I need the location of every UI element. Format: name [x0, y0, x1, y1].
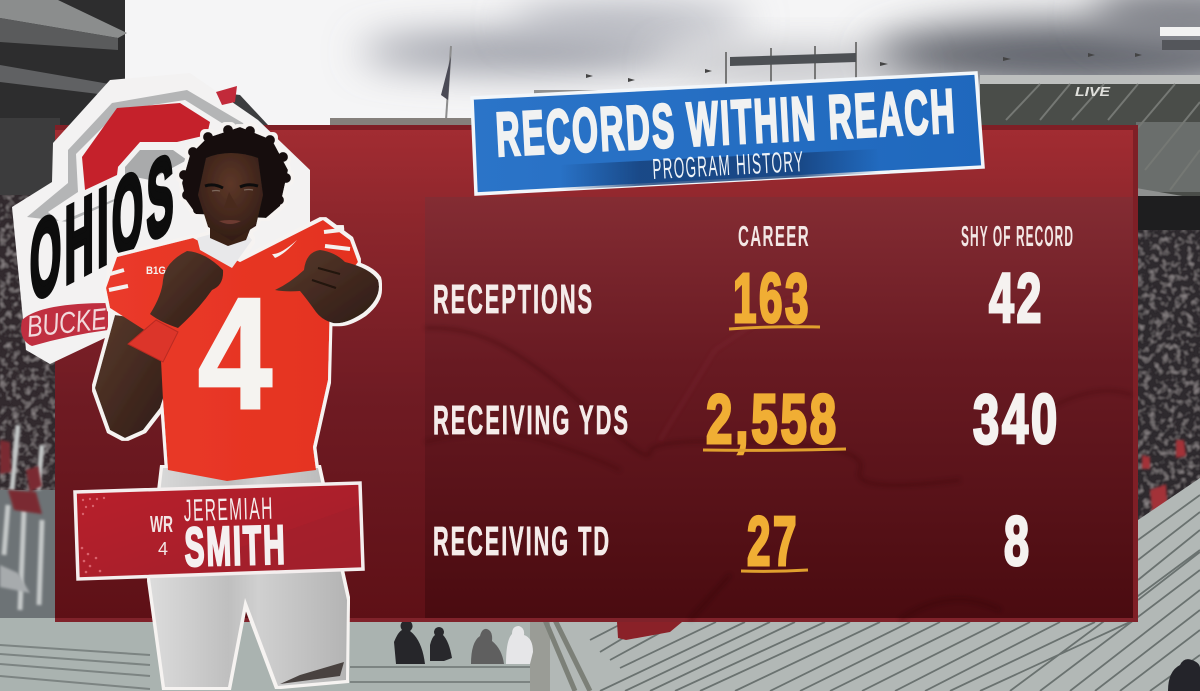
logo red O	[82, 103, 210, 190]
row value: yards shy of record: 340	[973, 380, 1060, 458]
logo white center	[118, 142, 200, 230]
left fist	[150, 251, 223, 328]
pants	[150, 468, 347, 687]
column heading: career: CAREER	[738, 221, 810, 253]
crowd, left	[0, 195, 56, 515]
upper deck seats, right	[980, 75, 1200, 206]
player first name: JEREMIAH	[183, 491, 274, 528]
logo: Ohio State block O	[12, 73, 310, 364]
fan, bottom right	[1168, 659, 1200, 691]
swoosh	[272, 240, 297, 258]
logo: Ohio State block O: OHIOS	[30, 129, 177, 325]
title banner	[472, 73, 983, 194]
player: Jeremiah Smith	[95, 125, 379, 687]
bleacher aisle with fans, left	[0, 425, 56, 622]
head: hair	[179, 125, 291, 218]
position and number: 4	[158, 539, 168, 559]
row value: touchdowns shy of record: 8	[1004, 502, 1029, 580]
lower bleachers	[0, 478, 1200, 691]
position and number	[150, 511, 173, 559]
row value: career receiving touchdowns: 27	[747, 502, 799, 580]
nameplate	[75, 483, 363, 579]
panel: red backdrop	[55, 125, 1138, 622]
pointing arm	[275, 250, 379, 323]
halftone dots	[81, 497, 105, 573]
logo red script badge	[21, 303, 109, 346]
row label: receptions: RECEPTIONS	[433, 276, 594, 322]
row label: receiving touchdowns: RECEIVING TD	[433, 518, 611, 564]
player surname: SMITH	[184, 513, 287, 578]
scoreboard sign and flags	[330, 27, 1200, 125]
sleeve stripes	[109, 230, 350, 290]
LIVE label: LIVE	[1075, 84, 1110, 99]
Big Ten mark: B1G	[146, 265, 166, 277]
logo gray ring	[27, 90, 250, 222]
jersey	[106, 220, 358, 481]
row value: receptions shy of record: 42	[989, 259, 1044, 337]
upper deck, left	[0, 0, 268, 198]
row value: career receiving yards: 2,558	[706, 380, 839, 458]
logo red script badge: BUCKE	[25, 303, 109, 344]
logo outer white shape	[12, 73, 310, 364]
collar	[197, 226, 252, 268]
position and number: WR	[150, 511, 173, 537]
crumple texture	[425, 300, 1132, 620]
panel: darker stats area	[425, 197, 1133, 618]
row label: receiving yards: RECEIVING YDS	[433, 397, 630, 443]
sky with clouds	[0, 0, 1200, 130]
wristband	[128, 320, 178, 362]
neck	[210, 225, 252, 246]
underline: receiving touchdowns	[741, 570, 808, 571]
title banner: PROGRAM HISTORY	[652, 146, 805, 186]
jersey number: 4	[198, 266, 272, 442]
head: face	[198, 153, 263, 241]
underline: receiving yards	[703, 449, 846, 450]
seated fans	[394, 620, 533, 664]
underline: receptions	[729, 327, 820, 329]
row value: career receptions: 163	[733, 259, 811, 337]
lower arm	[95, 315, 172, 438]
crowd, right	[1136, 196, 1200, 528]
stats table	[433, 221, 1074, 580]
